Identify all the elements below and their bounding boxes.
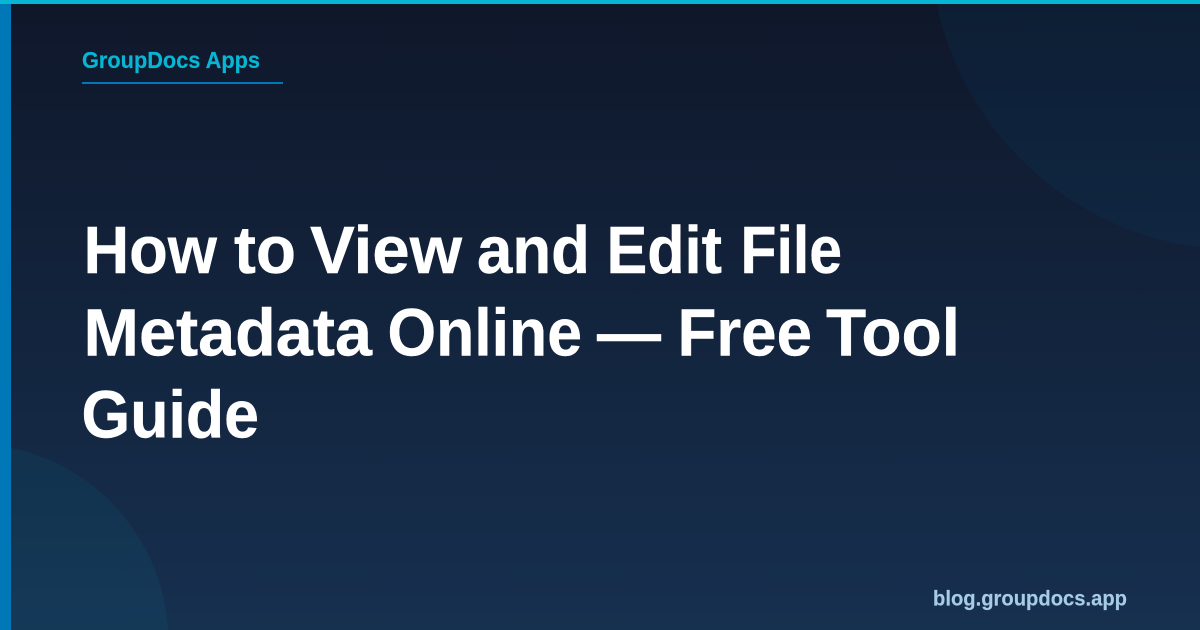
left accent bar xyxy=(0,4,11,630)
title: to xyxy=(234,214,296,288)
title: and xyxy=(477,214,590,288)
title: How xyxy=(84,214,217,288)
site url: blog.groupdocs.app xyxy=(933,588,1127,610)
decorative circle: bottom left xyxy=(0,446,168,630)
brand underline xyxy=(82,82,283,84)
decorative circle: top right xyxy=(936,0,1200,247)
top accent bar xyxy=(0,0,1200,4)
title: Guide xyxy=(82,378,259,452)
title: Edit xyxy=(606,214,722,288)
title: — xyxy=(597,296,661,370)
title: View xyxy=(310,214,462,288)
title: Free xyxy=(678,296,812,370)
title: Online xyxy=(388,296,582,370)
title: File xyxy=(740,214,842,288)
title: Metadata xyxy=(84,296,373,370)
title: Tool xyxy=(826,296,960,370)
brand label: GroupDocs Apps xyxy=(82,47,260,73)
title xyxy=(82,214,960,452)
